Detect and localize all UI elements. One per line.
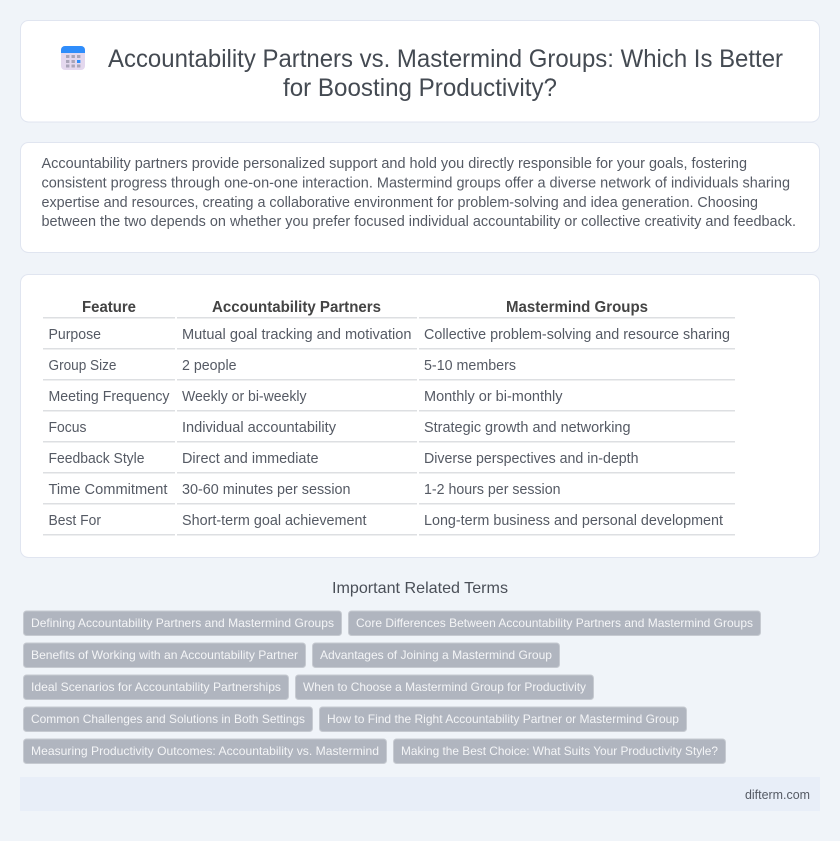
panel: related term tags: Ideal Scenarios for Accountability Partnerships [31,680,281,694]
panel: related term tags [24,611,760,764]
table row: time commitment: 30-60 minutes per session [182,482,350,498]
table row: best for [43,513,735,536]
table row: time commitment [43,482,735,504]
table row: feedback style: Diverse perspectives and in-depth [424,451,638,467]
table row: feedback style: Feedback Style [48,451,144,467]
panel: related term tags: Common Challenges and Solutions in Both Settings [31,712,305,726]
table header row [43,299,735,318]
panel: related term tags: When to Choose a Mastermind Group for Productivity [303,680,586,694]
table row: purpose: Mutual goal tracking and motivation [182,327,412,343]
text block: summary: Accountability partners provide personalized support and hold you directly responsible for your goals, fostering [42,156,747,172]
table row: purpose: Purpose [48,327,101,343]
table row: meeting frequency [43,389,735,412]
table row: feedback style [43,451,735,474]
panel: related term tags: Core Differences Between Accountability Partners and Mastermind Groups [356,616,753,630]
table row: purpose [43,327,735,350]
table row: group size: 5-10 members [424,358,516,374]
table row: focus: Strategic growth and networking [424,420,630,436]
table row: best for: Best For [48,513,101,529]
panel: comparison table [20,274,820,558]
table row: group size: Group Size [48,358,116,374]
title: for Boosting Productivity? [283,74,557,102]
panel: related term tags: Benefits of Working with an Accountability Partner [31,648,298,662]
heading: important related terms: Important Related Terms [332,580,508,597]
table row: group size: 2 people [182,358,236,374]
table header row: Accountability Partners [212,299,381,316]
panel: summary paragraph [20,142,820,252]
table row: focus [43,420,735,442]
panel: related term tags: How to Find the Right Accountability Partner or Mastermind Group [327,712,679,726]
table row: purpose: Collective problem-solving and resource sharing [424,327,730,343]
panel: footer [20,777,820,811]
panel: related term tags: Defining Accountability Partners and Mastermind Groups [31,616,334,630]
table row: focus: Focus [48,420,86,436]
table row: group size [43,358,735,380]
text block: summary: between the two depends on whether you prefer focused individual accountability or collective creativity and feedback. [42,214,796,230]
panel: related term tags: Advantages of Joining a Mastermind Group [320,648,552,662]
table row: meeting frequency: Monthly or bi-monthly [424,389,563,405]
table row: meeting frequency: Meeting Frequency [48,389,170,405]
text block: summary: consistent progress through one-on-one interaction. Mastermind groups offer a diverse network of individuals sharing [42,176,790,192]
panel: header [20,20,820,122]
table row: time commitment: Time Commitment [48,482,168,498]
text block: summary [42,156,796,230]
title [108,45,783,102]
panel: related term tags: Measuring Productivity Outcomes: Accountability vs. Mastermind [31,744,379,758]
text block: summary: expertise and resources, creating a collaborative environment for problem-solving and idea generation. Choosing [42,195,758,211]
footer source text: difterm.com [745,787,810,802]
table header row: Feature [82,299,136,316]
panel: related term tags: Making the Best Choice: What Suits Your Productivity Style? [401,744,718,758]
table header row: Mastermind Groups [506,299,648,316]
table row: meeting frequency: Weekly or bi-weekly [182,389,307,405]
table row: time commitment: 1-2 hours per session [424,482,560,498]
title: Accountability Partners vs. Mastermind Groups: Which Is Better [108,45,783,73]
table row: feedback style: Direct and immediate [182,451,318,467]
icon: calendar [61,46,85,70]
table row: focus: Individual accountability [182,420,337,436]
table row: best for: Short-term goal achievement [182,513,366,529]
table row: best for: Long-term business and personal development [424,513,723,529]
